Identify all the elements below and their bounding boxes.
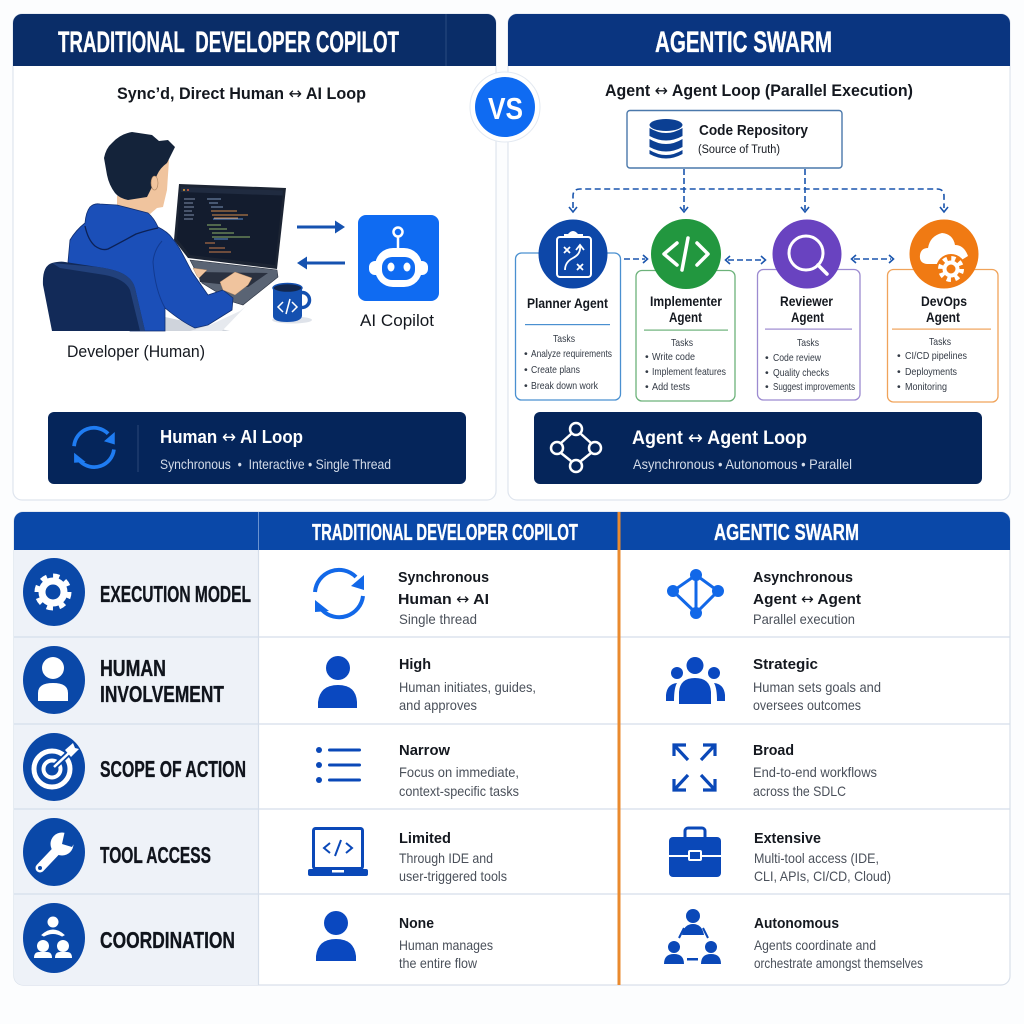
- swarm text: Agent ↔ Agent: [753, 590, 861, 608]
- icon: list: [316, 747, 361, 783]
- devops tasks: Deployments: [905, 366, 957, 378]
- reviewer title: [780, 294, 834, 325]
- column title: traditional: TRADITIONAL DEVELOPER COPILOT: [312, 519, 578, 545]
- icon: person: [316, 911, 356, 961]
- repository label: Code Repository: [699, 123, 808, 139]
- traditional text: [399, 656, 536, 713]
- planner tasks: •: [524, 364, 528, 376]
- swarm text: [753, 742, 877, 799]
- icon: code mug: [272, 284, 312, 324]
- row label: EXECUTION MODEL: [100, 581, 251, 607]
- neck and face: [117, 160, 169, 214]
- callout subtitle: Synchronous • Interactive • Single Thread: [160, 456, 391, 472]
- agent card: devops: [888, 220, 998, 402]
- implementer title: [650, 294, 723, 325]
- implementer title: Agent: [669, 310, 702, 325]
- traditional text: and approves: [399, 697, 477, 713]
- devops tasks: CI/CD pipelines: [905, 350, 967, 362]
- devops title: DevOps: [921, 294, 967, 309]
- subtitle: Sync’d, Direct Human ↔ AI Loop: [117, 84, 366, 103]
- repository sublabel: (Source of Truth): [698, 144, 780, 156]
- devops tasks: Tasks: [929, 336, 951, 348]
- ear: [151, 176, 158, 190]
- row: scope of action: [23, 733, 877, 801]
- reviewer tasks: •: [765, 352, 769, 364]
- implementer tasks: •: [645, 381, 649, 393]
- implementer tasks: Add tests: [652, 381, 690, 393]
- code repository box: [627, 110, 842, 168]
- row label: HUMAN: [100, 655, 166, 681]
- callout title: Agent ↔ Agent Loop: [632, 427, 807, 449]
- badge: VS: [470, 72, 540, 142]
- traditional text: user-triggered tools: [399, 868, 507, 884]
- callout: human AI loop: [48, 412, 466, 484]
- swarm text: Agents coordinate and: [754, 937, 876, 953]
- swarm text: Strategic: [753, 656, 818, 673]
- hands: [193, 268, 252, 295]
- icon: target: [23, 733, 85, 801]
- icon: sync: [315, 570, 364, 617]
- row label: [100, 655, 224, 707]
- traditional text: None: [399, 915, 434, 932]
- traditional text: [399, 830, 507, 884]
- arrow: copilot to developer: [297, 256, 345, 270]
- panel title: TRADITIONAL DEVELOPER COPILOT: [58, 26, 399, 59]
- icon: planner clipboard: [538, 220, 608, 288]
- chair: [43, 262, 145, 331]
- swarm text: CLI, APIs, CI/CD, Cloud): [754, 868, 891, 884]
- traditional text: [399, 742, 519, 799]
- icon: network: [551, 423, 601, 472]
- swarm text: Multi-tool access (IDE,: [754, 850, 879, 866]
- row label: TOOL ACCESS: [100, 842, 211, 868]
- swarm text: across the SDLC: [753, 783, 846, 799]
- traditional text: [398, 569, 489, 627]
- devops tasks: [897, 336, 967, 393]
- devops tasks: •: [897, 366, 901, 378]
- reviewer tasks: •: [765, 381, 769, 393]
- label: developer: Developer (Human): [67, 342, 205, 361]
- devops title: [921, 294, 967, 325]
- reviewer tasks: •: [765, 367, 769, 379]
- icon: team: [666, 657, 725, 704]
- reviewer tasks: Tasks: [797, 337, 819, 349]
- traditional text: Limited: [399, 830, 451, 847]
- icon: network: [667, 569, 724, 619]
- row label: COORDINATION: [100, 927, 235, 953]
- swarm text: Broad: [753, 742, 794, 759]
- agent card: planner: [516, 220, 620, 400]
- planner tasks: Create plans: [531, 364, 580, 376]
- agent card: reviewer: [758, 220, 860, 400]
- planner title: Planner Agent: [527, 296, 608, 311]
- row label: INVOLVEMENT: [100, 681, 224, 707]
- callout title: Human ↔ AI Loop: [160, 427, 303, 448]
- swarm text: Human sets goals and: [753, 679, 881, 695]
- row: tool access: [23, 818, 891, 886]
- devops title: Agent: [926, 310, 960, 325]
- callout: agent agent loop: [534, 412, 982, 484]
- reviewer title: Reviewer: [780, 294, 834, 309]
- row: coordination: [23, 903, 923, 973]
- icon: person: [318, 656, 357, 708]
- devops tasks: •: [897, 381, 901, 393]
- column title: swarm: AGENTIC SWARM: [714, 519, 859, 545]
- implementer tasks: [645, 337, 726, 393]
- swarm text: Extensive: [754, 830, 821, 847]
- traditional text: Focus on immediate,: [399, 764, 519, 780]
- devops tasks: •: [897, 350, 901, 362]
- swarm text: Parallel execution: [753, 611, 855, 627]
- icon: sync: [74, 428, 115, 467]
- panel title: AGENTIC SWARM: [655, 26, 832, 59]
- icon: agents orchestrating: [664, 909, 721, 964]
- badge: VS: VS: [488, 91, 523, 126]
- icon: magnifier: [772, 220, 842, 288]
- reviewer title: Agent: [791, 310, 824, 325]
- dashed connectors from repository to agents: [569, 169, 948, 212]
- swarm text: [753, 569, 861, 627]
- swarm text: Asynchronous: [753, 569, 853, 586]
- implementer tasks: Write code: [652, 351, 695, 363]
- row: execution model: [23, 558, 861, 627]
- dashed arrows between agents: [624, 255, 894, 264]
- planner tasks: Tasks: [553, 333, 575, 345]
- illustration: developer at laptop: [43, 132, 286, 331]
- swarm text: [753, 656, 881, 713]
- panel: agentic swarm: [508, 14, 1010, 500]
- planner tasks: Analyze requirements: [531, 348, 612, 360]
- reviewer tasks: Suggest improvements: [773, 381, 855, 393]
- arrow: developer to copilot: [297, 220, 345, 234]
- swarm text: orchestrate amongst themselves: [754, 955, 923, 971]
- icon: wrench: [23, 818, 85, 886]
- panel header: [13, 14, 496, 66]
- agent card: implementer: [636, 219, 735, 401]
- desk shadow: [165, 317, 230, 331]
- icon: laptop code: [308, 828, 368, 876]
- icon: database: [650, 119, 682, 158]
- implementer title: Implementer: [650, 294, 723, 309]
- swarm text: End-to-end workflows: [753, 764, 877, 780]
- hoodie: [68, 204, 233, 331]
- icon: coordination: [23, 903, 85, 973]
- subtitle: Agent ↔ Agent Loop (Parallel Execution): [605, 81, 913, 100]
- traditional text: High: [399, 656, 431, 673]
- swarm text: [754, 915, 923, 971]
- traditional text: Synchronous: [398, 569, 489, 586]
- reviewer tasks: Quality checks: [773, 367, 829, 379]
- planner tasks: •: [524, 348, 528, 360]
- traditional text: Human initiates, guides,: [399, 679, 536, 695]
- panel: traditional developer copilot: [13, 14, 496, 500]
- icon: code: [651, 219, 721, 289]
- laptop: [174, 184, 286, 305]
- implementer tasks: •: [645, 366, 649, 378]
- hair: [104, 132, 175, 200]
- traditional text: Human manages: [399, 937, 493, 953]
- devops tasks: Monitoring: [905, 381, 947, 393]
- icon: briefcase: [669, 828, 721, 877]
- reviewer tasks: [765, 337, 855, 393]
- implementer tasks: Tasks: [671, 337, 693, 349]
- swarm text: [754, 830, 891, 884]
- traditional text: Single thread: [399, 611, 477, 627]
- comparison table: [14, 512, 1010, 985]
- label: AI copilot: AI Copilot: [360, 311, 434, 330]
- traditional text: Human ↔ AI: [398, 590, 489, 608]
- panel header: [508, 14, 1010, 66]
- icon: expand arrows: [674, 745, 715, 790]
- traditional text: Through IDE and: [399, 850, 493, 866]
- traditional text: context-specific tasks: [399, 783, 519, 799]
- callout subtitle: Asynchronous • Autonomous • Parallel: [633, 456, 852, 472]
- reviewer tasks: Code review: [773, 352, 821, 364]
- implementer tasks: Implement features: [652, 366, 726, 378]
- icon: person: [23, 646, 85, 714]
- icon: AI copilot robot: [358, 215, 439, 301]
- traditional text: the entire flow: [399, 955, 478, 971]
- icon: gear: [23, 558, 85, 626]
- traditional text: Narrow: [399, 742, 450, 759]
- swarm text: Autonomous: [754, 915, 839, 932]
- planner tasks: Break down work: [531, 380, 599, 392]
- table header: [14, 512, 1010, 550]
- planner tasks: [524, 333, 612, 392]
- planner tasks: •: [524, 380, 528, 392]
- row: human involvement: [23, 646, 881, 714]
- implementer tasks: •: [645, 351, 649, 363]
- swarm text: oversees outcomes: [753, 697, 861, 713]
- icon: cloud and gear: [910, 220, 978, 288]
- row label: SCOPE OF ACTION: [100, 756, 246, 782]
- traditional text: [399, 915, 493, 971]
